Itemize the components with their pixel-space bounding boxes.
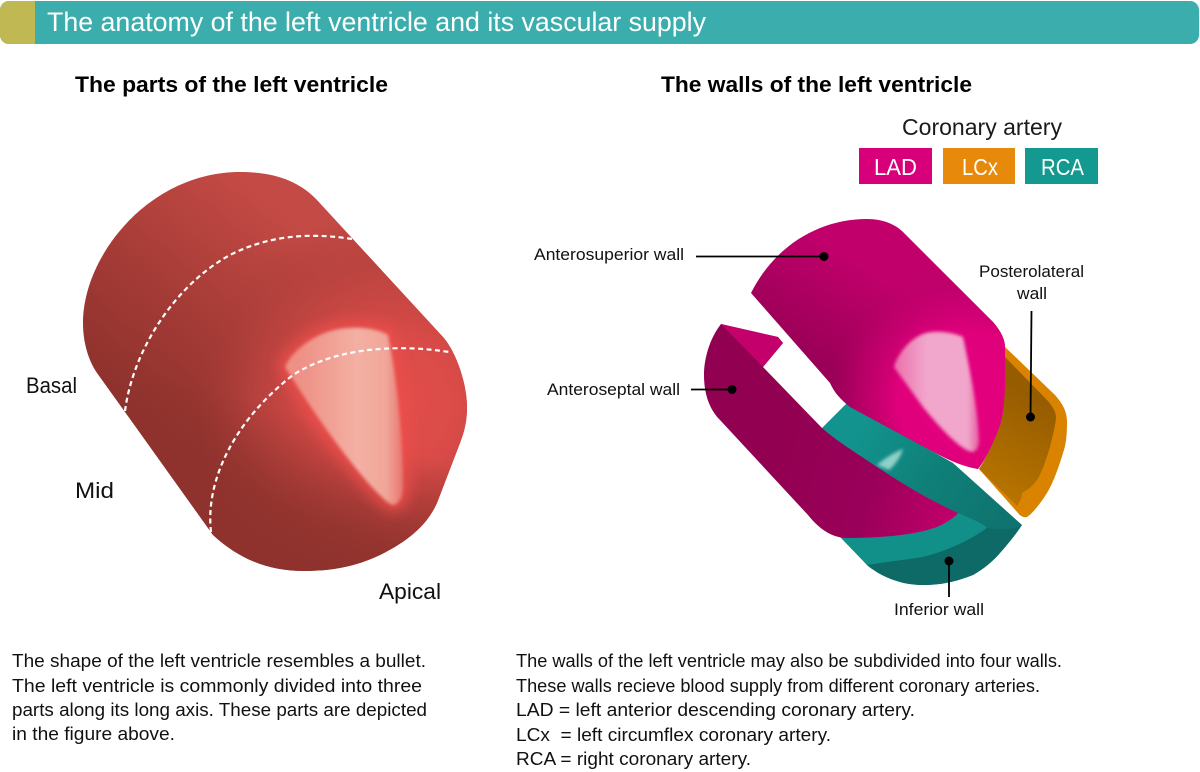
legend: RCA: RCA	[1041, 154, 1085, 180]
label: Apical: Apical	[379, 579, 441, 604]
dashed line: mid to apical	[210, 348, 449, 532]
text block: parts description: The shape of the left ventricle resembles a bullet.	[12, 650, 426, 671]
text block: walls description: LAD = left anterior descending coronary artery.	[516, 699, 915, 720]
label: Mid: Mid	[75, 478, 114, 503]
left ventricle bullet illustration	[83, 172, 467, 571]
label: inferior wall: Inferior wall	[894, 601, 984, 619]
text block: parts description: parts along its long axis. These parts are depicted	[12, 699, 427, 720]
heading: walls: The walls of the left ventricle	[661, 72, 972, 97]
header accent block	[0, 1, 35, 44]
legend: RCA	[1025, 148, 1098, 184]
text block: parts description: The left ventricle is commonly divided into three	[12, 675, 422, 696]
label: posterolateral wall	[979, 263, 1084, 303]
dashed line: basal to mid	[125, 236, 352, 411]
text block: walls description: LCx = left circumflex coronary artery.	[516, 724, 831, 745]
leader: anterosuperior	[696, 252, 828, 261]
apex highlight	[285, 328, 403, 505]
legend title: Coronary artery	[902, 114, 1062, 140]
wall: anteroseptal (magenta)	[704, 324, 958, 538]
label: posterolateral wall: Posterolateral	[979, 263, 1084, 281]
label: anteroseptal wall: Anteroseptal wall	[547, 381, 680, 399]
legend: LAD	[859, 148, 932, 184]
legend: coronary artery	[859, 114, 1098, 184]
heading: parts: The parts of the left ventricle	[75, 72, 388, 97]
wall: posterolateral (orange)	[979, 347, 1067, 517]
label: posterolateral wall: wall	[1016, 285, 1047, 303]
text block: parts description: in the figure above.	[12, 723, 175, 744]
leader: posterolateral	[1026, 311, 1035, 422]
inferior darker band	[867, 525, 1022, 585]
leader: anteroseptal	[691, 385, 736, 394]
legend: LCx: LCx	[962, 154, 998, 180]
inferior lower band	[840, 513, 987, 565]
label: anterosuperior wall: Anterosuperior wall	[534, 246, 684, 264]
legend: LAD: LAD	[874, 154, 917, 180]
leader: inferior	[944, 556, 954, 597]
title: The anatomy of the left ventricle and its vascular supply	[47, 7, 706, 37]
text block: parts description	[12, 650, 427, 744]
inferior highlight	[877, 449, 903, 470]
label: Basal: Basal	[26, 373, 77, 398]
text block: walls description: These walls recieve blood supply from different coronary arteries.	[516, 675, 1040, 696]
text block: walls description: RCA = right coronary artery.	[516, 748, 751, 769]
text block: walls description: The walls of the left ventricle may also be subdivided into four walls.	[516, 650, 1062, 671]
anteroseptal lit edge	[721, 324, 783, 367]
apex highlight	[894, 332, 979, 452]
wall: anterosuperior (magenta)	[745, 215, 1010, 475]
header bar	[0, 1, 1199, 44]
wall: inferior (teal)	[822, 403, 1022, 585]
text block: walls description	[516, 650, 1062, 769]
legend: LCx	[943, 148, 1015, 184]
